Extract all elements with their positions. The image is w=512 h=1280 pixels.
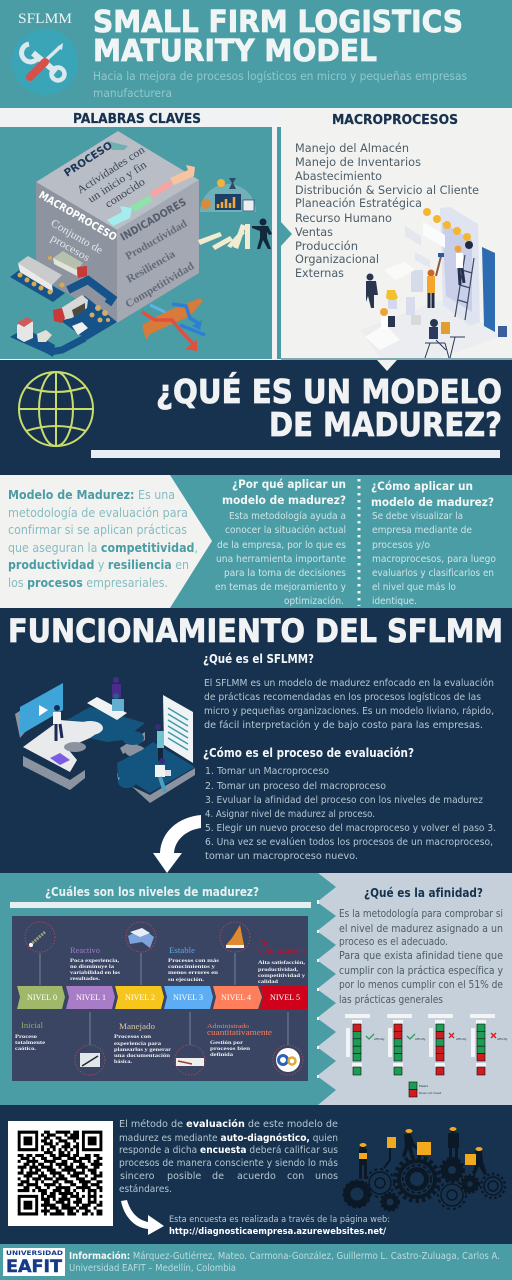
panel: que es un modelo de madurez	[19, 371, 502, 458]
level text: manejado: Manejado	[119, 1021, 155, 1031]
pointer triangle	[377, 360, 397, 371]
block: proceso de evaluacion	[203, 746, 496, 862]
list of macroprocesses: Manejo de Inventarios	[295, 155, 421, 169]
cube diagram	[36, 131, 199, 323]
illustration: phone with reviews and team	[360, 207, 507, 358]
level text: administrado: procesos bien	[210, 1046, 251, 1052]
chart: affinity cells: Affinity	[456, 1037, 467, 1041]
column: por que aplicar: ¿Por qué aplicar un	[232, 477, 346, 491]
face label: proceso: Actividades con	[75, 144, 147, 197]
face label: indicadores: Resiliencia	[124, 248, 178, 286]
column: por que aplicar: una herramienta importante	[216, 554, 346, 565]
block: que es el sflmm: ¿Qué es el SFLMM?	[203, 652, 314, 666]
logo: universidad eafit: EAFIT	[6, 1257, 62, 1277]
block: proceso de evaluacion: ¿Cómo es el proceso de evaluación?	[203, 746, 414, 760]
level text: inicial: caótico.	[15, 1046, 37, 1052]
column: como aplicar: el nivel que más lo	[372, 581, 456, 593]
level text: manejado: experiencia para	[114, 1041, 161, 1047]
chart: affinity cells	[345, 1014, 508, 1097]
column: como aplicar: evaluarlos y clasificarlos en	[372, 568, 494, 579]
panel: que es la afinidad	[317, 873, 512, 1105]
column: por que aplicar	[215, 477, 346, 607]
level chevrons: NIVEL 2	[125, 992, 155, 1002]
face label: proceso: PROCESO	[62, 139, 115, 180]
arrow: curved down	[153, 815, 201, 873]
block: que es el sflmm: de prácticas recomendadas en los procesos logísticos de las	[204, 691, 481, 703]
text: afinidad explanation	[339, 908, 503, 1006]
panel: autodiagnostico	[0, 1105, 512, 1244]
level text: en optimizacion: Alta satisfacción,	[258, 960, 306, 966]
block: proceso de evaluacion: 4. Asignar nivel de madurez al proceso.	[205, 809, 375, 820]
level text: estable: Estable	[169, 945, 195, 955]
level text: manejado: planearlos y generar	[114, 1047, 172, 1053]
panel: funcionamiento del sflmm	[8, 612, 503, 873]
level text: administrado: cuantitativamente	[207, 1028, 272, 1037]
list of macroprocesses: Manejo del Almacén	[295, 141, 409, 155]
level text: en optimizacion: optimización	[258, 945, 306, 955]
text: information credits: Universidad EAFIT – Medellín, Colombia	[69, 1263, 236, 1274]
text: information credits	[69, 1251, 500, 1274]
subtitle: manufacturera	[93, 86, 172, 100]
logo: universidad eafit: UNIVERSIDAD	[6, 1250, 63, 1257]
list of macroprocesses: Ventas	[295, 225, 333, 239]
level text: en optimizacion	[258, 938, 306, 985]
qr code	[8, 1121, 113, 1226]
level chevrons: NIVEL 1	[76, 992, 106, 1002]
block: proceso de evaluacion: 1. Tomar un Macroproceso	[205, 766, 329, 777]
chart: affinity cells: Affinity	[415, 1037, 426, 1041]
level text: reactivo: no disminuye la	[70, 964, 114, 970]
face label: indicadores	[118, 196, 196, 311]
text: survey link: http://diagnosticaempresa.azurewebsites.net/	[169, 1226, 387, 1237]
icon: split arrows	[142, 298, 205, 351]
level text: en optimizacion: productividad,	[258, 967, 299, 973]
text: evaluation method: sincero	[120, 1171, 155, 1182]
illustration: puzzle team	[15, 677, 195, 803]
level text: manejado	[114, 1021, 172, 1065]
block: proceso de evaluacion: 6. Una vez se evalúen todos los procesos de un macroproceso,	[205, 836, 493, 848]
level chevrons: NIVEL 5	[270, 992, 300, 1002]
arrow panel: definition text: confirmar si se aplican prácticas	[8, 523, 187, 537]
level chevrons: NIVEL 4	[221, 992, 252, 1002]
column: por que aplicar: optimización.	[284, 595, 344, 607]
level text: inicial: Inicial	[21, 1020, 44, 1030]
list of macroprocesses: Planeación Estratégica	[295, 196, 422, 210]
text: evaluation method: responde a dicha encuesta deberá calificar sus	[119, 1144, 338, 1156]
column: por que aplicar: Esta metodología ayuda a	[229, 510, 346, 522]
column: como aplicar	[371, 479, 496, 607]
level text: reactivo	[70, 945, 121, 982]
column: por que aplicar: para la toma de decisiones	[224, 568, 346, 579]
icon: warehouses and logistics route	[10, 251, 117, 357]
illustration: workers on gears	[344, 1127, 505, 1211]
level text: reactivo: Reactivo	[70, 945, 100, 955]
level text: reactivo: Poca experiencia,	[70, 958, 120, 964]
level text: inicial: totalmente	[15, 1040, 46, 1046]
list of macroprocesses: Abastecimiento	[295, 169, 382, 183]
list of macroprocesses: Recurso Humano	[295, 211, 392, 225]
face label: proceso: conocido	[103, 176, 148, 211]
list of macroprocesses: Externas	[295, 266, 344, 280]
icon: dominoes and person	[198, 218, 272, 250]
text: evaluation method: acuerdo	[237, 1171, 276, 1182]
panel: definicion y aplicacion	[0, 475, 512, 608]
level chevrons	[17, 986, 308, 1009]
subtitle: Hacia la mejora de procesos logísticos en micro y pequeñas empresas	[93, 69, 467, 83]
level text: en optimizacion: calidad	[258, 979, 279, 985]
column: por que aplicar: en temas de mejoramiento y	[215, 582, 346, 593]
column: por que aplicar: modelo de madurez?	[222, 493, 346, 507]
face label: indicadores: INDICADORES	[118, 196, 189, 244]
panel: footer	[0, 1244, 512, 1280]
face label: macroproceso: Conjunto de	[48, 217, 105, 257]
level text: manejado: una documentación	[114, 1053, 171, 1059]
title	[93, 5, 463, 69]
level text: en optimizacion: competitividad y	[258, 973, 305, 979]
icon: globe	[19, 372, 93, 446]
arrow panel: definition text: que aseguran la competitividad,	[8, 541, 198, 555]
list of macroprocesses: Producción	[295, 239, 358, 253]
column: como aplicar: empresa mediante de	[372, 525, 472, 536]
text: evaluation method: El método de evaluación de este modelo de	[119, 1118, 338, 1130]
level text: estable	[168, 945, 220, 983]
brand label SFLMM: SFLMM	[18, 11, 72, 27]
heading: macroprocesos: MACROPROCESOS	[332, 113, 458, 128]
arrow panel: definition text	[0, 475, 212, 608]
face label: macroproceso: MACROPROCESO	[36, 189, 119, 244]
level text: reactivo: variabilidad en los	[70, 970, 121, 976]
level text: administrado: definida	[210, 1052, 233, 1058]
text: evaluation method: madurez es mediante auto-diagnóstico, quien	[119, 1132, 338, 1144]
level text: estable: conocimientos y	[168, 964, 215, 970]
text: evaluation method	[119, 1118, 338, 1195]
arrow panel: definition text: Modelo de Madurez: Es una	[8, 488, 175, 502]
column: como aplicar: identique.	[372, 596, 417, 607]
arrow: curved right	[121, 1200, 164, 1235]
face label: indicadores: Productividad	[124, 218, 189, 263]
column: como aplicar: ¿Cómo aplicar un	[371, 479, 473, 493]
text: afinidad explanation: proceso es el adecuado.	[339, 936, 448, 948]
icon: wrench and screwdriver	[12, 29, 78, 95]
process arrows	[107, 165, 195, 226]
level chevrons: NIVEL 0	[27, 992, 57, 1002]
panel: niveles de madurez	[0, 873, 345, 1105]
subtitle	[93, 69, 467, 100]
column: como aplicar: macroprocesos, para luego	[372, 554, 496, 565]
column: como aplicar: procesos y/o	[372, 540, 430, 551]
panel: macroprocesos	[281, 108, 512, 371]
face label: indicadores: Competitividad	[123, 260, 196, 311]
chart: affinity cells: Affinity	[497, 1037, 508, 1041]
level text: administrado: Administrado	[207, 1023, 249, 1030]
logo: universidad eafit	[3, 1248, 65, 1277]
text: evaluation method: estándares.	[119, 1183, 172, 1195]
level text: estable: menos errores en	[168, 970, 219, 976]
text: afinidad explanation: las prácticas generales	[339, 994, 443, 1006]
block: proceso de evaluacion: 2. Tomar un proceso del macroproceso	[205, 781, 386, 792]
chart: affinity cells: Does not meet	[419, 1091, 442, 1095]
heading: palabras claves: PALABRAS CLAVES	[73, 112, 201, 127]
level text: estable: su ejecución.	[168, 977, 205, 983]
face label: proceso: un inicio y fin	[86, 159, 149, 206]
column: por que aplicar: de la empresa, por lo que es	[217, 540, 346, 551]
block: proceso de evaluacion: tomar un macroproceso nuevo.	[205, 851, 358, 862]
heading: niveles de madurez: ¿Cuáles son los niveles de madurez?	[45, 885, 259, 899]
column: como aplicar: modelo de madurez?	[371, 495, 494, 509]
block: que es el sflmm	[203, 652, 494, 731]
list of macroprocesses	[295, 141, 479, 280]
chart: maturity timeline	[12, 916, 308, 1081]
heading: que es un modelo de madurez	[156, 371, 502, 444]
text: evaluation method: procesos de manera consciente y siendo lo más	[119, 1157, 338, 1169]
text: evaluation method: con	[287, 1171, 304, 1182]
list of macroprocesses: Organizacional	[295, 252, 379, 266]
column: como aplicar: Se debe visualizar la	[372, 511, 463, 522]
level text: en optimizacion: En	[258, 938, 269, 948]
text: evaluation method: de	[212, 1171, 224, 1182]
column: por que aplicar: conocer la situación actual	[225, 524, 346, 536]
block: que es el sflmm: El SFLMM es un modelo de madurez enfocado en la evaluación	[204, 677, 494, 689]
text: evaluation method: unos	[315, 1171, 338, 1182]
heading: afinidad: ¿Qué es la afinidad?	[364, 885, 483, 900]
arrow panel: definition text: metodología de evaluación para	[8, 506, 188, 520]
text: evaluation method: posible	[167, 1171, 201, 1182]
text: survey link: Esta encuesta es realizada a través de la página web:	[169, 1214, 390, 1225]
face label: macroproceso: procesos	[48, 232, 92, 264]
level text: inicial: Proceso	[15, 1034, 37, 1040]
level text: manejado: Procesos con	[114, 1034, 152, 1040]
list of macroprocesses: Distribución & Servicio al Cliente	[295, 183, 479, 197]
face label: proceso	[62, 139, 149, 211]
title: MATURITY MODEL	[93, 34, 377, 69]
level chevrons: NIVEL 3	[173, 992, 203, 1002]
chart: affinity cells: Meets	[419, 1084, 428, 1088]
level text: estable: Procesos con más	[168, 958, 220, 964]
level text: reactivo: resultados.	[70, 976, 101, 982]
title: SMALL FIRM LOGISTICS	[93, 5, 463, 40]
text: survey link	[169, 1214, 390, 1237]
block: que es el sflmm: de fácil interpretación y de bajo costo para las empresas.	[204, 719, 483, 731]
level text: inicial	[15, 1020, 46, 1052]
arrow panel: definition text: productividad y resiliencia en	[8, 558, 189, 572]
arrow panel: definition text: los procesos empresariales.	[8, 576, 168, 590]
panel: header	[0, 0, 512, 109]
block: proceso de evaluacion: 3. Evuluar la afinidad del proceso con los niveles de madurez	[205, 795, 483, 806]
level text: administrado: Gestión por	[210, 1040, 244, 1046]
level text: administrado	[207, 1023, 272, 1058]
chart: affinity cells: Affinity	[374, 1037, 385, 1041]
icon: dashboard with charts	[200, 178, 256, 212]
level text: manejado: básica.	[114, 1059, 133, 1065]
panel: palabras claves	[0, 108, 290, 360]
